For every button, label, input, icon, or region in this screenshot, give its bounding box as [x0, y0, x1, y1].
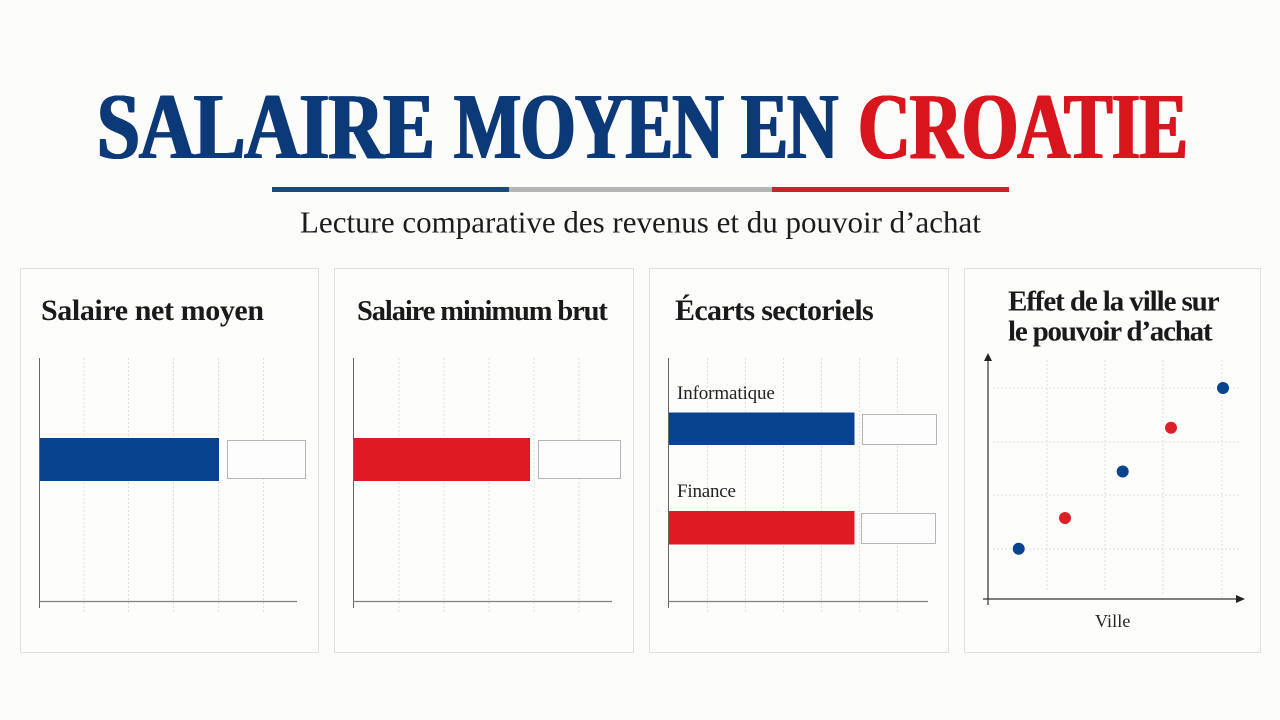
- bar chart: salaire net: [39, 358, 306, 613]
- title: SALAIRE: [97, 75, 434, 179]
- panel: écarts sectoriels: [650, 268, 948, 652]
- scatter chart: [983, 353, 1245, 631]
- title: MOYEN: [454, 75, 722, 179]
- panel: salaire minimum brut: [334, 268, 634, 652]
- bar: informatique: [669, 412, 854, 445]
- value box: informatique: [862, 414, 936, 444]
- heading: effet de la ville: Effet de la ville sur: [1008, 286, 1220, 318]
- heading: écarts sectoriels: Écarts sectoriels: [675, 294, 873, 327]
- x axis arrow: [983, 595, 1245, 603]
- axis label: ville: Ville: [1095, 611, 1130, 631]
- panel: salaire net moyen: [20, 268, 318, 652]
- y axis arrow: [984, 353, 992, 605]
- bar chart: salaire minimum: [353, 358, 620, 613]
- value box: finance: [862, 514, 936, 544]
- heading: salaire net moyen: Salaire net moyen: [41, 294, 264, 327]
- title underline: [272, 187, 1009, 192]
- label: informatique: Informatique: [677, 383, 775, 404]
- heading: effet de la ville: le pouvoir d’achat: [1008, 316, 1213, 348]
- title: [97, 75, 1187, 179]
- bar: finance: [669, 511, 854, 544]
- heading: salaire minimum brut: Salaire minimum brut: [357, 296, 608, 327]
- title: CROATIE: [858, 75, 1187, 179]
- panel: effet de la ville: [964, 268, 1260, 652]
- bar chart: secteurs: [668, 358, 936, 613]
- title: EN: [741, 75, 837, 179]
- subtitle: Lecture comparative des revenus et du pouvoir d’achat: [300, 204, 981, 240]
- label: finance: Finance: [677, 481, 736, 502]
